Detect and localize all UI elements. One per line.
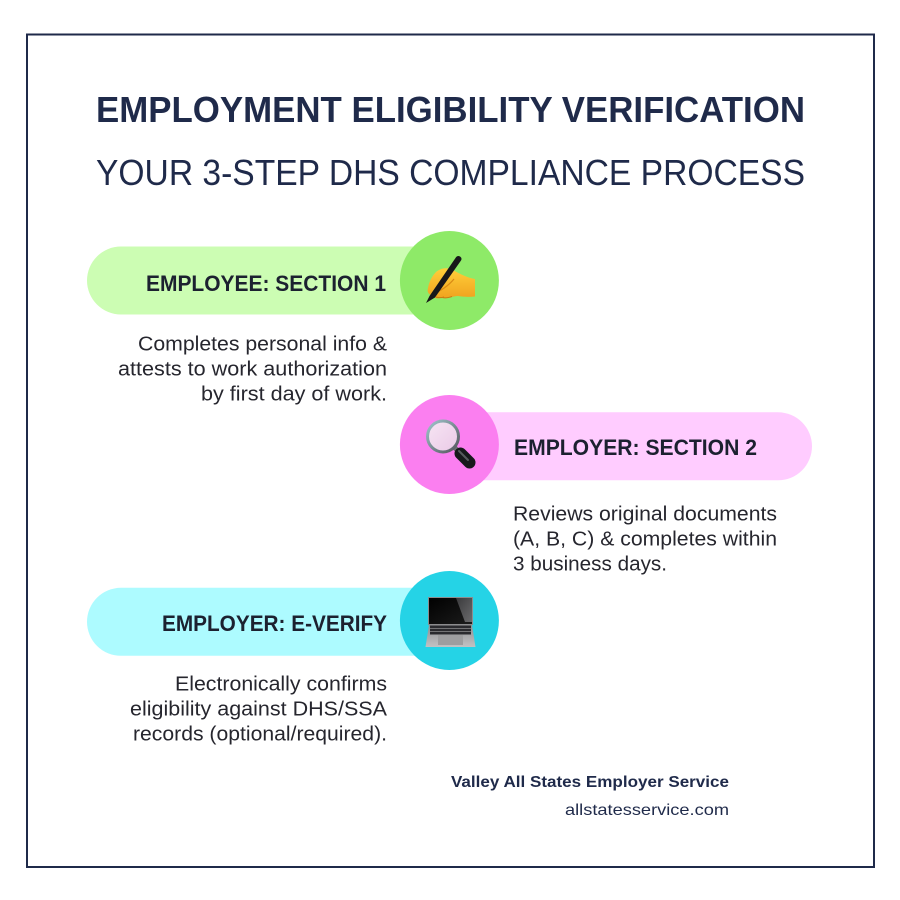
step 3 description [130,674,388,746]
step 1 description: Completes personal info & [138,334,388,356]
website: allstatesservice.com [565,802,729,819]
step 2 description: Reviews original documents [513,504,777,526]
title: EMPLOYMENT ELIGIBILITY VERIFICATION [96,89,805,130]
step 1 description: attests to work authorization [118,358,387,380]
step 1 description [118,334,388,406]
step 3 heading: EMPLOYER: E-VERIFY [162,611,387,636]
step 2 pill [460,412,812,480]
company name: Valley All States Employer Service [451,774,729,791]
icon: magnifying glass [428,421,470,462]
subtitle: YOUR 3-STEP DHS COMPLIANCE PROCESS [96,152,805,193]
step 1 pill [87,246,440,314]
step 2 heading: EMPLOYER: SECTION 2 [514,435,757,460]
step 3 circle [400,571,499,670]
panel: step 3 employer e-verify [87,571,499,746]
icon: laptop [426,598,476,647]
step 2 description: 3 business days. [513,554,667,576]
step 2 description: (A, B, C) & completes within [513,528,777,550]
panel: step 1 employee section 1 [87,231,499,406]
step 2 description [513,504,777,576]
step 1 description: by first day of work. [201,384,387,406]
step 3 pill [87,588,440,656]
step 3 description: Electronically confirms [175,674,387,696]
step 3 description: eligibility against DHS/SSA [130,698,388,720]
panel: step 2 employer section 2 [400,395,812,576]
step 1 circle [400,231,499,330]
step 3 description: records (optional/required). [133,724,387,746]
step 1 heading: EMPLOYEE: SECTION 1 [146,271,386,296]
step 2 circle [400,395,499,494]
icon: writing hand [426,256,475,303]
